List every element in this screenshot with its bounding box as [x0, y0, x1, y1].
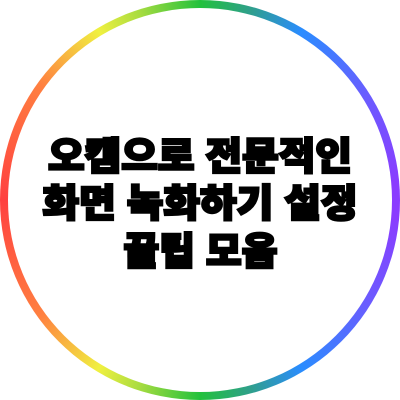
- title line 3: 꿀팁 모음: [124, 232, 278, 274]
- title line 1: 오캠으로 전문적인: [48, 136, 352, 178]
- title line 2: 화면 녹화하기 설정: [42, 184, 358, 226]
